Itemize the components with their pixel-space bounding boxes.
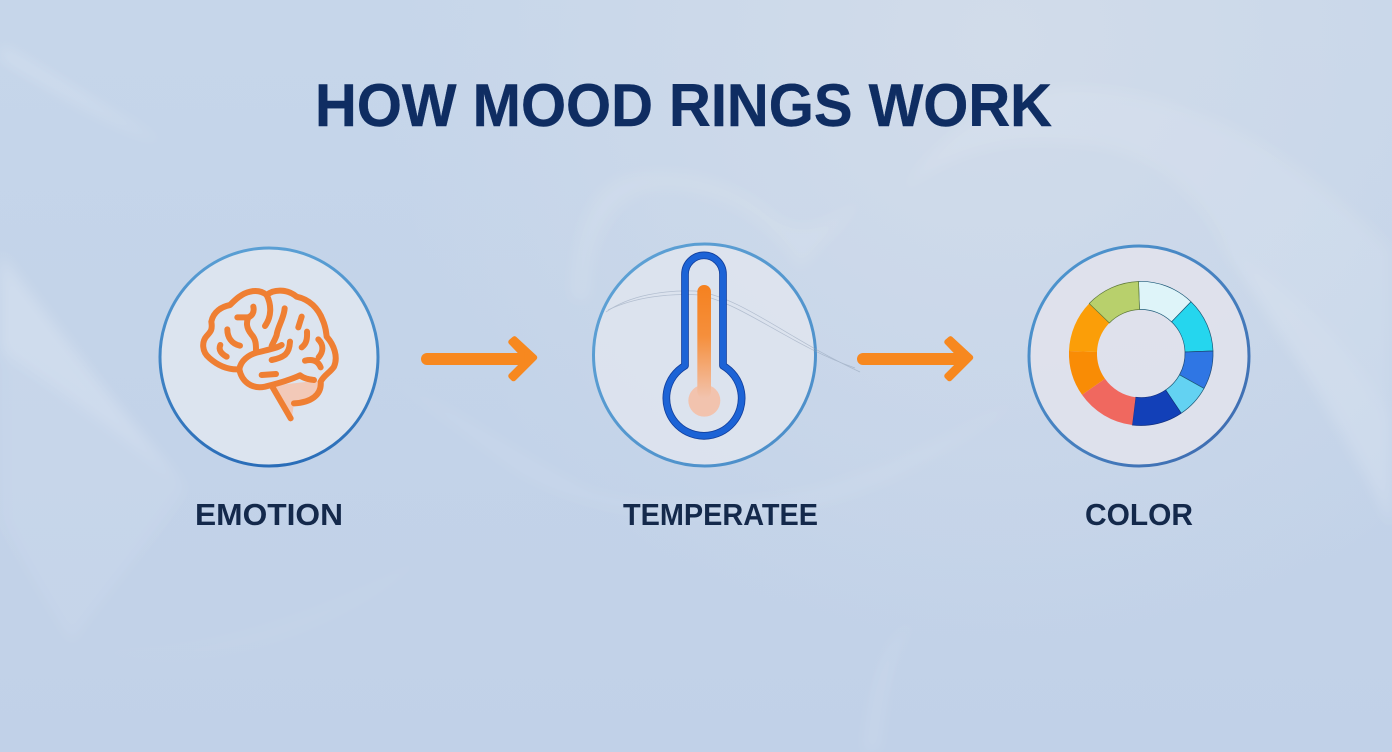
icon: brain <box>203 291 336 419</box>
arrow: emotion to temperature <box>421 339 534 378</box>
icon: color wheel <box>1069 281 1213 426</box>
faint wave lines over the circle <box>606 291 860 372</box>
arrow: temperature to color <box>857 339 970 378</box>
label: color: COLOR <box>1085 497 1193 532</box>
label: emotion: EMOTION <box>195 497 343 532</box>
step 1: emotion <box>160 248 378 532</box>
circle: color <box>1029 246 1249 466</box>
step 2: temperature <box>594 244 860 532</box>
circle: temperature <box>594 244 816 466</box>
step 3: color <box>1029 246 1249 532</box>
circle: emotion <box>160 248 378 466</box>
label: temperature: TEMPERATEE <box>623 497 818 532</box>
title: HOW MOOD RINGS WORK <box>315 72 1052 139</box>
icon: thermometer <box>666 255 742 436</box>
